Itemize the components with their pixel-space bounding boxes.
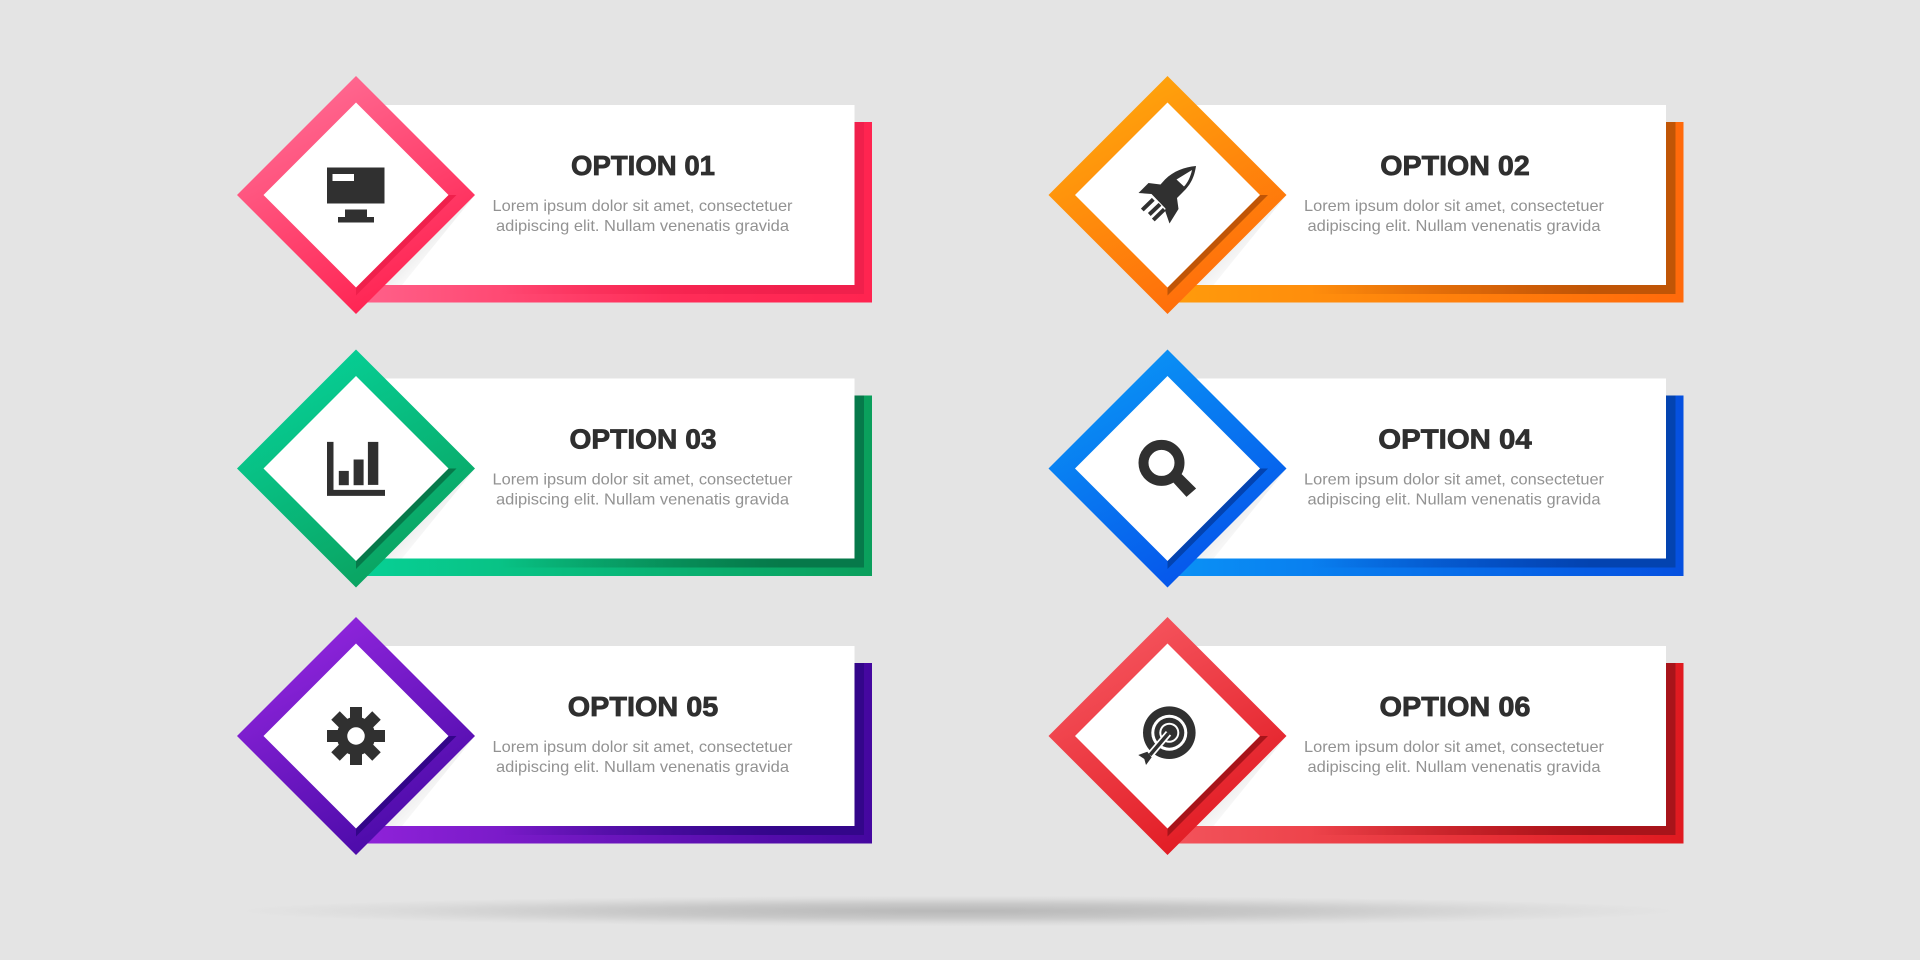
diamond white center	[1075, 376, 1260, 561]
accent frame	[1172, 396, 1684, 576]
heading: OPTION 03	[570, 424, 716, 454]
text block	[1304, 739, 1605, 776]
icon: rocket	[1138, 166, 1196, 224]
diamond frame	[237, 617, 475, 855]
heading: OPTION 05	[568, 691, 718, 722]
diamond white center	[1075, 102, 1260, 288]
accent inner shade	[1172, 663, 1676, 835]
icon: bar chart	[327, 442, 385, 496]
diamond inner shade	[1168, 736, 1268, 836]
diamond inner shade	[1168, 468, 1268, 569]
diamond shadow	[385, 736, 475, 826]
diamond inner shade	[356, 736, 456, 836]
icon: target with arrow	[1138, 706, 1196, 765]
white card	[356, 378, 854, 558]
text block: Lorem ipsum dolor sit amet, consectetuer	[1304, 739, 1605, 756]
accent frame	[360, 663, 872, 844]
panel: option 04	[1048, 350, 1684, 588]
diamond frame	[1048, 350, 1286, 588]
white card	[1168, 646, 1666, 826]
diamond white center	[264, 102, 448, 288]
icon: magnifier	[1144, 445, 1196, 497]
text block	[492, 472, 793, 508]
diamond shadow	[385, 195, 475, 285]
panel: option 02	[1048, 76, 1684, 314]
accent inner shade	[360, 396, 864, 568]
accent inner shade	[1172, 396, 1676, 568]
accent frame	[1172, 663, 1684, 844]
text block: Lorem ipsum dolor sit amet, consectetuer	[492, 472, 793, 488]
text block: adipiscing elit. Nullam venenatis gravida	[1308, 759, 1601, 776]
accent frame	[1172, 122, 1684, 302]
text block	[1304, 198, 1605, 235]
heading: OPTION 02	[1380, 150, 1530, 181]
text block	[1304, 472, 1605, 508]
text block: Lorem ipsum dolor sit amet, consectetuer	[492, 739, 793, 756]
heading: OPTION 04	[1378, 424, 1532, 454]
text block: Lorem ipsum dolor sit amet, consectetuer	[1304, 198, 1605, 215]
text block: adipiscing elit. Nullam venenatis gravida	[496, 492, 789, 508]
diamond inner shade	[356, 468, 456, 569]
diamond frame	[1048, 76, 1286, 314]
diamond white center	[264, 644, 448, 828]
heading: OPTION 01	[571, 150, 715, 181]
text block: adipiscing elit. Nullam venenatis gravida	[496, 759, 789, 776]
panel: option 01	[237, 76, 872, 314]
heading: OPTION 06	[1380, 691, 1530, 722]
icon: monitor	[327, 168, 384, 222]
diamond frame	[1048, 617, 1286, 855]
white card	[1168, 105, 1666, 285]
text block: Lorem ipsum dolor sit amet, consectetuer	[492, 198, 793, 215]
diamond shadow	[1196, 195, 1286, 285]
diamond shadow	[1196, 468, 1286, 558]
diamond white center	[1075, 644, 1260, 828]
accent inner shade	[1172, 122, 1676, 294]
accent inner shade	[360, 663, 864, 835]
diamond inner shade	[1168, 195, 1268, 296]
text block	[492, 198, 793, 235]
white card	[356, 105, 854, 285]
diamond white center	[264, 376, 448, 561]
panel: option 05	[237, 617, 872, 855]
text block	[492, 739, 793, 776]
accent inner shade	[360, 122, 864, 294]
diamond inner shade	[356, 195, 456, 296]
panel: option 03	[237, 350, 872, 588]
white card	[356, 646, 854, 826]
panel: option 06	[1048, 617, 1684, 855]
text block: Lorem ipsum dolor sit amet, consectetuer	[1304, 472, 1605, 488]
white card	[1168, 378, 1666, 558]
diamond shadow	[1196, 736, 1286, 826]
diamond shadow	[385, 468, 475, 558]
text block: adipiscing elit. Nullam venenatis gravida	[1308, 492, 1601, 508]
text block: adipiscing elit. Nullam venenatis gravida	[496, 218, 789, 235]
diamond frame	[237, 76, 475, 314]
text block: adipiscing elit. Nullam venenatis gravida	[1308, 218, 1601, 235]
icon: gear	[327, 707, 385, 765]
ground shadow	[236, 896, 1680, 926]
diamond frame	[237, 350, 475, 588]
accent frame	[360, 122, 872, 302]
accent frame	[360, 396, 872, 576]
